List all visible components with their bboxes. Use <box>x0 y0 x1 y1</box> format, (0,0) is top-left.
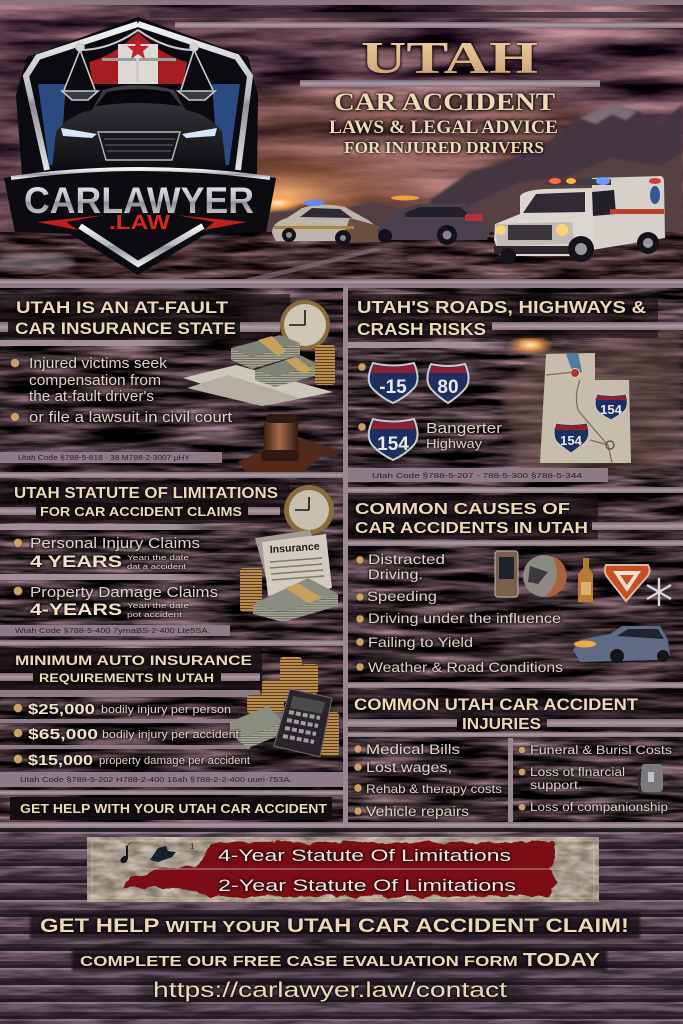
bullet <box>354 784 362 792</box>
call to action headline: GET HELP WITH YOUR UTAH CAR ACCIDENT CLAIM! <box>40 916 629 937</box>
cause text: Weather & Road Conditions <box>368 659 563 675</box>
title band <box>492 322 683 330</box>
mountains <box>250 104 683 240</box>
illustration: crashed SUV <box>377 196 490 245</box>
claim duration: 4 YEARS <box>30 553 122 571</box>
logo scales of justice <box>62 43 215 100</box>
divider: vertical column separator <box>343 285 348 825</box>
shield: map 154 upper <box>595 394 627 420</box>
subheading: for injured drivers: FOR INJURED DRIVERS <box>344 138 544 157</box>
strip below insurance panel <box>0 822 683 828</box>
coverage label: property damage per accident <box>99 755 250 767</box>
injury text: Loss ot flnarcial <box>530 767 625 779</box>
amount: $65,000 <box>28 726 98 743</box>
code citation <box>0 625 230 636</box>
heading: car accident: CAR ACCIDENT <box>334 89 555 116</box>
row: two-year statute: 2-Year Statute Of Limitations <box>218 876 516 895</box>
icon: paper edge <box>187 375 300 406</box>
bullet <box>356 593 364 601</box>
panel: common causes <box>348 493 683 682</box>
warm sky wash <box>20 90 683 240</box>
plaque inner edge <box>92 841 594 898</box>
icon: money stack <box>253 578 338 622</box>
logo: CarLawyer.law shield <box>4 17 276 275</box>
subheading: laws and legal advice: LAWS & LEGAL ADVICE <box>329 117 558 138</box>
bullet <box>358 423 366 431</box>
icon: globe <box>523 555 567 597</box>
title band <box>0 673 260 681</box>
logo .law: .LAW <box>109 212 170 234</box>
cause text: Driving. <box>368 566 423 582</box>
logo wordmark: CARLAWYER <box>24 180 254 221</box>
code citation: Wtah Code §788-5-400 7yrnaBS-2-400 Lte5SA. <box>15 626 210 635</box>
footer grain <box>0 828 683 1024</box>
code citation <box>0 772 343 787</box>
icon: calculator <box>274 689 332 757</box>
bullet text: Injured victims seek <box>29 356 168 372</box>
title backing <box>348 495 598 539</box>
icon: money stack one <box>231 335 300 369</box>
illustration: police car <box>272 200 386 246</box>
red stain <box>122 842 558 897</box>
coverage label: bodily injury per person <box>101 704 231 716</box>
code citation: Utah Code §788-5-202 H788-2-400 16ah §788-2-2-400 uuei-753A. <box>20 775 292 784</box>
claim label: Personal Injury Claims <box>30 536 200 552</box>
bullet text: compensation from <box>29 373 161 389</box>
heading line two: CRASH RISKS <box>357 319 486 339</box>
panel: minimum insurance <box>0 646 343 822</box>
code citation: Utah Code §788-5-207 - 788-5-300 §788-5-344 <box>372 471 582 480</box>
heading line two: REQUIREMENTS IN UTAH <box>39 671 214 685</box>
icon: insurance document <box>255 530 332 596</box>
call to action subheading: COMPLETE OUR FREE CASE EVALUATION FORM TODAY <box>80 950 600 970</box>
icon: insurance document: Insurance <box>269 541 320 556</box>
call to action band: GET HELP WITH YOUR UTAH CAR ACCIDENT <box>20 801 327 816</box>
icon: clock <box>284 485 334 535</box>
bullet <box>14 586 22 596</box>
claim label: Property Damage Claims <box>30 585 218 601</box>
small note: pot accident <box>127 610 183 619</box>
icon: money stack <box>230 706 283 748</box>
bullet text: the at-fault driver's <box>29 389 154 405</box>
heading line one: COMMON CAUSES OF <box>355 501 570 518</box>
heading line one: COMMON UTAH CAR ACCIDENT <box>354 696 638 714</box>
bullet <box>10 358 20 368</box>
logo blue side panels <box>38 84 240 165</box>
call to action band <box>10 797 332 820</box>
code citation <box>348 468 608 482</box>
illustration: car <box>573 626 670 663</box>
small note: Yean the date <box>127 553 189 562</box>
row: four-year statute: 4-Year Statute Of Limitations <box>218 846 511 865</box>
logo flag <box>80 30 194 84</box>
mountain backdrop <box>500 320 683 470</box>
contact address: https://carlawyer.law/contact <box>153 979 507 1002</box>
title band <box>592 522 683 530</box>
cause text: Speeding <box>367 588 437 604</box>
heading line one: UTAH STATUTE OF LIMITATIONS <box>14 485 278 502</box>
shield: map 154 upper: 154 <box>600 402 623 417</box>
code citation <box>0 452 222 463</box>
shield: interstate 15: -15 <box>379 377 407 398</box>
bullet <box>354 763 362 771</box>
small number: 1 <box>190 842 195 851</box>
sun <box>506 335 554 355</box>
bullet <box>10 412 20 422</box>
heading line two: CAR INSURANCE STATE <box>15 319 236 338</box>
title band <box>0 322 280 332</box>
code citation: Utah Code §788-5-818 · 38 M788-2-3007 µHY <box>18 453 190 462</box>
strip below at-fault panel <box>0 472 343 478</box>
ground <box>0 232 683 280</box>
sunset glow <box>115 133 455 257</box>
panel: footer background <box>0 828 683 1024</box>
panel: hero banner <box>0 0 683 285</box>
shield: interstate 80 <box>427 364 469 403</box>
road streak <box>240 248 382 280</box>
heading line two: INJURIES <box>462 716 541 733</box>
icon: yield sign <box>605 565 650 601</box>
coverage label: bodily injury per accident <box>102 729 239 741</box>
plaque divider <box>145 868 565 870</box>
title backing <box>0 294 290 340</box>
divider strip <box>348 342 528 348</box>
bullet <box>356 663 364 671</box>
shield: interstate 15 <box>369 363 418 403</box>
heading line two: FOR CAR ACCIDENT CLAIMS <box>40 505 242 519</box>
amount: $25,000 <box>28 701 95 718</box>
hero sky <box>0 0 683 282</box>
cause text: Driving under the influence <box>368 610 561 626</box>
title band <box>347 719 683 727</box>
bullet <box>356 556 364 564</box>
illustration: Utah map <box>540 353 631 463</box>
icon: music note mark <box>120 842 134 863</box>
logo banner <box>4 169 276 232</box>
bullet <box>356 615 364 623</box>
icon: phone <box>495 551 518 597</box>
cause text: Distracted <box>368 551 445 567</box>
icon: canister <box>639 764 663 792</box>
title band dark centre <box>33 670 221 685</box>
bullet <box>14 728 22 738</box>
cause text: Failing to Yield <box>368 634 473 650</box>
divider strip <box>0 790 343 795</box>
claim duration: 4-YEARS <box>30 601 122 619</box>
logo car <box>52 85 226 168</box>
illustration: ambulance <box>494 176 665 264</box>
bullet <box>356 638 364 646</box>
divider strip <box>0 340 215 346</box>
heading line one: UTAH'S ROADS, HIGHWAYS & <box>357 297 646 317</box>
icon: coin stack <box>240 568 262 612</box>
logo red swooshes <box>37 215 247 230</box>
backing band for subheading <box>72 949 607 971</box>
title backing <box>348 690 683 731</box>
strip below roads panel <box>348 487 683 493</box>
snow patches <box>0 254 75 270</box>
highway name: Bangerter <box>426 421 502 437</box>
amount: $15,000 <box>28 752 93 769</box>
shield: route 154 <box>369 419 418 460</box>
small note: Yean the date <box>127 601 189 610</box>
logo silver chevron <box>80 226 203 264</box>
icon: clock <box>280 300 330 350</box>
backing band for url <box>140 978 520 1002</box>
bullet <box>354 807 362 815</box>
title band dark centre <box>8 318 240 338</box>
strip above injuries panel <box>348 682 683 688</box>
title band <box>0 507 280 515</box>
divider strip <box>348 732 683 737</box>
logo outer shield <box>4 17 276 275</box>
logo silver border <box>26 24 250 170</box>
bullet <box>518 746 526 754</box>
shield: map 154 lower: 154 <box>560 433 583 448</box>
title backing <box>0 481 290 523</box>
panel: roads and highways <box>348 288 683 487</box>
divider strip <box>0 524 250 530</box>
shield: map 154 lower <box>554 423 589 453</box>
title band dark centre <box>36 503 248 520</box>
strip below statute panel <box>0 640 343 646</box>
injury text: support. <box>530 780 582 792</box>
icon: papers <box>183 365 333 405</box>
injury text: Vehicle repairs <box>366 804 469 819</box>
icon: coin stack <box>315 345 335 385</box>
icon: money stack two <box>255 355 318 387</box>
icon: boat mark <box>150 846 176 862</box>
small note: dat a accident <box>127 562 187 571</box>
divider strip <box>0 574 240 580</box>
panel: statute of limitations <box>0 478 343 640</box>
shield: route 154: 154 <box>377 434 409 455</box>
panel: common injuries <box>347 688 683 822</box>
panel: at-fault insurance <box>0 288 343 472</box>
divider strip <box>348 540 683 546</box>
heading: UTAH: UTAH <box>361 33 538 83</box>
setting sun <box>250 193 306 213</box>
backing band for headline <box>30 913 640 939</box>
icon: gavel <box>238 414 338 472</box>
injury text: Medical Bills <box>366 742 460 757</box>
shield: interstate 80: 80 <box>437 377 459 398</box>
bullet <box>518 803 526 811</box>
bottom hero strip <box>0 279 683 285</box>
title backing <box>0 648 262 690</box>
bullet <box>354 745 362 753</box>
icon: snowflake <box>647 578 671 606</box>
bullet <box>358 363 366 371</box>
divider strips <box>0 690 260 749</box>
injury text: Lost wages, <box>366 760 452 775</box>
bullet <box>14 754 22 764</box>
heading divider <box>300 80 600 87</box>
injury text: Rehab & therapy costs <box>366 782 502 796</box>
column divider <box>508 738 513 822</box>
injury text: Loss of companionship <box>530 802 668 814</box>
heading line one: UTAH IS AN AT-FAULT <box>16 298 229 317</box>
bullet <box>14 704 22 712</box>
icon: bottle <box>578 558 593 602</box>
icon: coin stacks <box>247 657 339 756</box>
top strip <box>0 0 683 28</box>
panel: statute plaque <box>87 837 599 902</box>
bullet text: or file a lawsuit in civil court <box>29 410 232 426</box>
bullet <box>14 538 22 548</box>
heading line two: CAR ACCIDENTS IN UTAH <box>355 520 588 537</box>
title backing <box>348 294 658 338</box>
highway name: Highway <box>426 436 483 451</box>
injury text: Funeral & Burisl Costs <box>530 745 672 757</box>
heading line one: MINIMUM AUTO INSURANCE <box>15 653 252 668</box>
bullet <box>518 768 526 776</box>
